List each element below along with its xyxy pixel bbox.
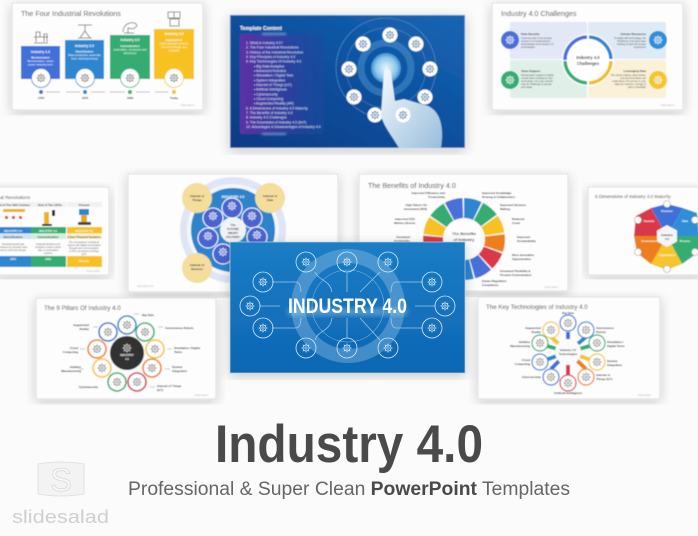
slide: The Benefits of Industry 4.0: Increased bbox=[396, 235, 410, 239]
slide: The Four Industrial Revolutions: Mass production, assembly bbox=[68, 53, 101, 57]
slide: The Benefits of Industry 4.0: The Benefits bbox=[452, 231, 477, 236]
slide: The Four Industrial Revolutions: Automation, computers and bbox=[114, 48, 147, 52]
slide: The Benefits of Industry 4.0: Reduced bbox=[512, 217, 524, 221]
slide: Industry 4.0 Challenges: Challenges bbox=[577, 61, 600, 66]
slide: The 9 Pillars Of Industry 4.0: Twins bbox=[174, 350, 182, 354]
slide: The Key Technologies of Industry 4.0 bbox=[478, 297, 660, 399]
slide: Industrial Revolutions table (cropped at left edge): End of The 1970s bbox=[38, 203, 62, 207]
slide: The Key Technologies of Industry 4.0: Cybersecurity bbox=[522, 375, 541, 379]
slide: Industrial Revolutions table (cropped at left edge): complete modern robots bbox=[35, 246, 62, 249]
slide: Industry 4.0 Challenges: Industry 4.0 Challenges bbox=[501, 9, 577, 18]
slide: The 9 Pillars Of Industry 4.0: System bbox=[172, 365, 183, 369]
slide: Industry 4.0 Challenges: slidesalad bbox=[661, 103, 674, 107]
slide: The Four Industrial Revolutions: 1969 bbox=[127, 96, 134, 100]
slide: The Key Technologies of Industry 4.0: Simulation / bbox=[607, 340, 624, 344]
slide: The 9 Pillars Of Industry 4.0: Cybersecurity bbox=[79, 385, 98, 389]
slide: Industry 4.0 Challenges: technologies bbox=[521, 46, 536, 49]
slide: The Four Industrial Revolutions: internet of things, and bbox=[161, 45, 187, 49]
slide: main INDUSTRY 4.0 cover: INDUSTRY 4.0 bbox=[288, 295, 407, 318]
slide: The Key Technologies of Industry 4.0: System bbox=[607, 359, 618, 363]
slide: The Key Technologies of Industry 4.0: Augmented bbox=[525, 326, 541, 330]
slide: Template Content: 6. 6 Dimensions of Industry 4.0 Maturity bbox=[246, 106, 308, 110]
slide: 6 Dimensions of Industry 4.0 Maturity: Data bbox=[682, 219, 688, 223]
slide: Industrial Revolutions table (cropped at left edge): INDUSTRY 4.0 bbox=[75, 229, 94, 233]
slide: Industry 4.0 Challenges: Human Resources bbox=[621, 32, 646, 36]
slide: The Benefits of Industry 4.0: High Return On bbox=[406, 203, 427, 207]
slide: The Benefits of Industry 4.0: of Industry bbox=[454, 237, 475, 242]
slide: The Four Industrial Revolutions: Cyber physical systems, bbox=[160, 42, 189, 46]
slide: The Key Technologies of Industry 4.0: The Key Technologies of Industry 4.0 bbox=[486, 304, 588, 311]
slide: Industry 4.0 Challenges: may be challenge to accept bbox=[521, 83, 552, 86]
slide: The Four Industrial Revolutions: slidesalad bbox=[181, 103, 194, 107]
slide: The 9 Pillars Of Industry 4.0 bbox=[36, 298, 216, 399]
slide: 6 Dimensions of Industry 4.0 Maturity: Organization bbox=[659, 253, 676, 257]
slide: Industrial Revolutions table (cropped at left edge): Automatization bbox=[38, 235, 59, 239]
slide: The Four Industrial Revolutions: Automatization bbox=[120, 44, 140, 48]
slide: Industry 4.0 Challenges: To adapt with technology, the bbox=[614, 37, 647, 40]
slide: Industrial Revolutions table (cropped at left edge): Cyber Physical Systems bbox=[67, 235, 101, 239]
slide: Internet of Things circular diagram: Things bbox=[192, 198, 202, 202]
slide: The Key Technologies of Industry 4.0: Technologies bbox=[559, 352, 578, 356]
slide: Template Content: 7. The Benefits of Industry 4.0 bbox=[246, 111, 293, 115]
slide: 6 Dimensions of Industry 4.0 Maturity: Process bbox=[680, 239, 691, 243]
slide: Template Content: 5. Key Technologies Of Industry 4.0 bbox=[246, 60, 301, 64]
slide: The Four Industrial Revolutions: power, weaving loom bbox=[28, 62, 54, 66]
slide: Internet of Things circular diagram: Internet of bbox=[190, 263, 204, 267]
slide: The 9 Pillars Of Industry 4.0: slidesalad bbox=[195, 393, 208, 397]
slide: The Benefits of Industry 4.0: Costs bbox=[512, 221, 520, 225]
slide: The 9 Pillars Of Industry 4.0: Additive bbox=[70, 365, 81, 369]
slide: Internet of Things circular diagram: Data bbox=[267, 198, 274, 202]
slide: Industry 4.0 Challenges: concerns of smart/network bbox=[521, 40, 551, 43]
subtitle: Professional & Super Clean PowerPoint Templates bbox=[128, 479, 570, 500]
slide: Industry 4.0 Challenges: and adapt bbox=[521, 86, 532, 89]
slide: Template Content: • System Integration bbox=[254, 78, 285, 82]
slide: Industry 4.0 Challenges: crucial when needing to new bbox=[521, 77, 553, 80]
slide: The Benefits of Industry 4.0: Increased Flexibility & bbox=[500, 269, 531, 273]
slide: Industrial Revolutions table (cropped at left edge): objects with digital technologies bbox=[67, 244, 102, 247]
slide: Industrial Revolutions table (cropped at left edge): Industrial growth was bbox=[2, 243, 25, 246]
slide: Template Content: 9. The Downsides of Industry 4.0 (IIoT) bbox=[246, 120, 306, 124]
slide: The 9 Pillars Of Industry 4.0: The 9 Pillars Of Industry 4.0 bbox=[44, 305, 121, 312]
slide: The Benefits of Industry 4.0: Improved Efficiency and bbox=[412, 191, 445, 195]
slide: Template Content: • Simulation / Digital Twin bbox=[254, 74, 293, 78]
logo: slidesalad: S bbox=[50, 462, 72, 498]
slide: The Key Technologies of Industry 4.0: Additive bbox=[519, 340, 530, 344]
slide: Internet of Things circular diagram: FUTURE bbox=[227, 227, 239, 231]
slide: The Four Industrial Revolutions: Mechanization bbox=[31, 56, 50, 60]
slide: The Benefits of Industry 4.0: Profitability bbox=[394, 239, 410, 243]
slide: 6 Dimensions of Industry 4.0 Maturity: 6 Dimensions of Industry 4.0 Maturity bbox=[595, 194, 672, 199]
slide: Template Content: • Cybersecurity bbox=[254, 92, 278, 96]
slide: Template Content: 2. The Four Industrial Revolutions bbox=[246, 46, 299, 50]
slide: The Four Industrial Revolutions bbox=[12, 3, 203, 110]
slide: The 9 Pillars Of Industry 4.0: Computing bbox=[63, 350, 78, 354]
slide: The Key Technologies of Industry 4.0: Cloud bbox=[522, 358, 530, 362]
slide: The Four Industrial Revolutions: Industry 2.0 bbox=[75, 44, 94, 48]
slide: The Benefits of Industry 4.0: Easier Regulation bbox=[482, 279, 507, 283]
slide: The Benefits of Industry 4.0: Sustainability bbox=[517, 239, 536, 243]
slide: The 9 Pillars Of Industry 4.0: Big Data bbox=[142, 313, 154, 317]
slide: The 9 Pillars Of Industry 4.0: Integration bbox=[172, 369, 187, 373]
slide: The 9 Pillars Of Industry 4.0: (IoT) bbox=[157, 388, 163, 392]
slide: Template Content: • Cloud Computing bbox=[254, 97, 283, 101]
slide: The Key Technologies of Industry 4.0: Computing bbox=[515, 362, 530, 366]
slide: Industry 4.0 Challenges: Industry 4.0 bbox=[576, 55, 600, 60]
slide: Industrial Revolutions table (cropped at left edge): INDUSTRY 3.0 bbox=[39, 229, 58, 233]
slide: Industrial Revolutions table (cropped at left edge): Present bbox=[79, 203, 89, 207]
slide: 6 Dimensions of Industry 4.0 Maturity bbox=[588, 187, 698, 275]
slide: The Benefits of Industry 4.0: slidesalad bbox=[545, 285, 558, 289]
slide: Template Content: 1. What is Industry 4.0? bbox=[246, 41, 283, 45]
slide: The Four Industrial Revolutions: Industry 4.0 bbox=[164, 32, 184, 36]
slide: The Four Industrial Revolutions: 1870 bbox=[82, 96, 89, 100]
slide: 6 Dimensions of Industry 4.0 Maturity: 4.0 bbox=[665, 237, 669, 241]
slide: The Benefits of Industry 4.0: Making bbox=[500, 207, 510, 211]
slide: Template Content: 10. Advantages & Disadvantages of Industry 4.0 bbox=[246, 125, 321, 129]
slide: The 9 Pillars Of Industry 4.0: Augmented bbox=[73, 323, 89, 327]
slide: Template Content: • Internet of Things (IoT) bbox=[254, 83, 292, 87]
slide: Industry 4.0 Challenges: jobs is feasibility bbox=[627, 86, 647, 89]
slide: The Four Industrial Revolutions: electronics bbox=[124, 51, 137, 55]
slide: Industry 4.0 Challenges: experience bbox=[634, 46, 647, 49]
slide: The Benefits of Industry 4.0: Improved ESG bbox=[395, 217, 416, 221]
slide: Internet of Things circular diagram: FACTORY bbox=[226, 235, 240, 239]
slide: Industrial Revolutions table (cropped at left edge): al Revolutions bbox=[0, 195, 31, 201]
slide: The Four Industrial Revolutions: Industry 1.0 bbox=[31, 50, 50, 54]
slide: The 9 Pillars Of Industry 4.0: 4.0 bbox=[125, 357, 129, 361]
slide: The 9 Pillars Of Industry 4.0: Reality bbox=[80, 327, 89, 331]
slide: The Benefits of Industry 4.0: Metrics (Score) bbox=[394, 221, 415, 225]
slide: Industry 4.0 Challenges: data are massive, change of bbox=[615, 83, 646, 86]
slide: The Key Technologies of Industry 4.0: slidesalad bbox=[638, 393, 651, 397]
slide: The Key Technologies of Industry 4.0: Things (IoT) bbox=[596, 377, 613, 381]
slide: Industrial Revolutions table (cropped at left edge): slidesalad bbox=[87, 269, 100, 273]
slide: Template Content: • Augmented Reality (AR) bbox=[254, 102, 294, 106]
slide: Industry 4.0 Challenges: Team Support bbox=[521, 69, 540, 73]
slide: Internet of Things circular diagram bbox=[128, 174, 338, 292]
slide: Industrial Revolutions table (cropped at left edge): 1870 bbox=[10, 257, 16, 261]
logo: slidesalad: slidesalad bbox=[12, 507, 109, 527]
slide: The Key Technologies of Industry 4.0: Manufacturing bbox=[510, 344, 530, 348]
slide: Internet of Things circular diagram: Services bbox=[191, 267, 203, 271]
slide: Industry 4.0 Challenges bbox=[492, 3, 683, 110]
slide: Industry 4.0 Challenges: understood, the person in your bbox=[612, 80, 646, 83]
slide: The Four Industrial Revolutions: networks bbox=[169, 48, 180, 52]
slide: Template Content: 8. Industry 4.0 Challenges bbox=[246, 116, 287, 120]
slide: Template Content bbox=[230, 15, 465, 148]
slide: Industrial Revolutions table (cropped at left edge): Present bbox=[79, 259, 89, 263]
slide: Industry 4.0 Challenges: Cybersecurity is the primary bbox=[521, 37, 553, 40]
slide: 6 Dimensions of Industry 4.0 Maturity: Governance bbox=[641, 239, 657, 243]
slide: Industrial Revolutions table (cropped at left edge): and by technical change bbox=[0, 249, 27, 252]
slide: Industry 4.0 Challenges: technologies and industry 4.0 bbox=[521, 43, 554, 46]
slide: The Benefits of Industry 4.0 bbox=[359, 174, 568, 291]
slide: The Four Industrial Revolutions: Industry 3.0 bbox=[120, 38, 140, 42]
slide: 6 Dimensions of Industry 4.0 Maturity: Industry bbox=[661, 233, 673, 237]
slide: Industrial Revolutions table (cropped at left edge): 1969 bbox=[45, 257, 51, 261]
main title: Industry 4.0 bbox=[215, 415, 483, 474]
slide: The 9 Pillars Of Industry 4.0: Simulation / Digital bbox=[174, 346, 200, 350]
slide: Template Content: • Big Data Analytics bbox=[254, 64, 285, 68]
slide: The Benefits of Industry 4.0: Improved bbox=[517, 235, 530, 239]
slide: The Four Industrial Revolutions: Electrification bbox=[76, 50, 94, 54]
slide: The Key Technologies of Industry 4.0: Internet of bbox=[596, 373, 610, 377]
slide: The Benefits of Industry 4.0: Improved Knowledge bbox=[482, 191, 512, 195]
slide: 6 Dimensions of Industry 4.0 Maturity: Security bbox=[644, 219, 655, 223]
slide: Industrial Revolutions table (cropped at left edge): INDUSTRY 2.0 bbox=[4, 229, 23, 233]
slide: The Key Technologies of Industry 4.0: Reality bbox=[532, 330, 541, 334]
slide: The Four Industrial Revolutions: Digitalization bbox=[166, 38, 183, 42]
slide: Internet of Things circular diagram: INDUSTRY 4.0 bbox=[222, 195, 245, 199]
slide: Industrial Revolutions table (cropped at left edge): through web communication bbox=[69, 247, 100, 250]
slide: The Benefits of Industry 4.0: Investment (ROI) bbox=[404, 207, 427, 211]
slide: Industrial Revolutions table (cropped at left edge) bbox=[0, 187, 109, 275]
slide: Industry 4.0 Challenges: training to have the proper bbox=[617, 43, 646, 46]
slide: Industrial Revolutions table (cropped at left edge): The convergence of physical bbox=[69, 241, 100, 244]
slide: Industry 4.0 Challenges: Workforce must also have bbox=[617, 40, 647, 43]
slide: The Key Technologies of Industry 4.0: Integration bbox=[607, 363, 622, 367]
slide: The Benefits of Industry 4.0: Improved Decision bbox=[500, 203, 526, 207]
logo: slidesalad bbox=[12, 462, 109, 527]
slide: main INDUSTRY 4.0 cover bbox=[230, 242, 465, 373]
slide: The Key Technologies of Industry 4.0: Industry 4.0 bbox=[560, 348, 576, 352]
slide: The 9 Pillars Of Industry 4.0: INDUSTRY bbox=[120, 353, 134, 357]
slide: The Benefits of Industry 4.0: More Innovative bbox=[512, 253, 534, 257]
slide: Industrial Revolutions table (cropped at left edge): (IoT) bbox=[81, 253, 87, 256]
slide: Industry 4.0 Challenges: technology. You may consult bbox=[521, 80, 553, 83]
slide: The Four Industrial Revolutions: 1784 bbox=[38, 96, 45, 100]
slide: Template Content: • Advanced Robotics bbox=[254, 69, 286, 73]
slide: Industry 4.0 Challenges: Having team support is highly bbox=[521, 74, 555, 77]
slide: Internet of Things circular diagram: Internet of bbox=[190, 194, 204, 198]
slide: Template Content: 3. History of the Industrial Revolution bbox=[246, 50, 303, 54]
slide: Industry 4.0 Challenges: Data Security bbox=[521, 32, 540, 36]
slide: The Key Technologies of Industry 4.0: Autonomous bbox=[596, 326, 614, 330]
slide: The Benefits of Industry 4.0: Compliance bbox=[482, 283, 499, 287]
slide: Industrial Revolutions table (cropped at left edge): Electrification bbox=[3, 235, 23, 239]
slide: The Benefits of Industry 4.0: Sharing & Collaboration bbox=[482, 195, 515, 199]
slide: Internet of Things circular diagram: The bbox=[230, 223, 236, 227]
slide: Internet of Things circular diagram: SMART bbox=[228, 231, 238, 235]
slide: 6 Dimensions of Industry 4.0 Maturity: Direction bbox=[661, 209, 673, 213]
slide: The Benefits of Industry 4.0: Product Customization bbox=[500, 273, 532, 277]
slide: Template Content: Template Content bbox=[240, 26, 282, 32]
slide: Industry 4.0 Challenges: Leveraging Data bbox=[624, 69, 646, 73]
slide: The Benefits of Industry 4.0: The Benefits of Industry 4.0 bbox=[368, 181, 456, 190]
slide: The 9 Pillars Of Industry 4.0: Internet of Things bbox=[157, 384, 182, 388]
slide: The Four Industrial Revolutions: lines, electrical energy bbox=[71, 56, 98, 60]
slide: Industry 4.0 Challenges: The report making, data mining, bbox=[611, 74, 646, 77]
slide: Template Content: 4. Key Principles of Industry 4.0 bbox=[246, 55, 295, 59]
slide: Industrial Revolutions table (cropped at left edge): Industrial divisions and bbox=[36, 243, 61, 246]
slide: Template Content: • Artificial Intelligence bbox=[254, 88, 287, 92]
slide: Industrial Revolutions table (cropped at left edge): take on automation bbox=[38, 249, 59, 252]
slide: Industrial Revolutions table (cropped at left edge): systems bbox=[44, 252, 53, 255]
slide: The Key Technologies of Industry 4.0: Digital Twins bbox=[607, 344, 625, 348]
slide: Internet of Things circular diagram: slidesalad.com bbox=[137, 285, 154, 288]
slide: Internet of Things circular diagram: Internet of bbox=[263, 194, 277, 198]
slide: The Benefits of Industry 4.0: Productivity bbox=[428, 195, 445, 199]
slide: Industry 4.0 Challenges: and documentation are bbox=[620, 77, 647, 80]
slide: The Key Technologies of Industry 4.0: Big Data bbox=[562, 311, 574, 315]
slide: The 9 Pillars Of Industry 4.0: Cloud bbox=[70, 346, 78, 350]
slide: The Benefits of Industry 4.0: Opportunities bbox=[512, 257, 531, 261]
slide: The Key Technologies of Industry 4.0: Artificial Intelligence bbox=[554, 391, 583, 395]
slide: The 9 Pillars Of Industry 4.0: Manufacturing bbox=[61, 369, 81, 373]
slide: The Four Industrial Revolutions: Today bbox=[170, 96, 179, 100]
slide: The Key Technologies of Industry 4.0: Robots bbox=[596, 330, 606, 334]
slide: Industrial Revolutions table (cropped at left edge): of PCs, via internet of things bbox=[69, 250, 100, 253]
slide: The Four Industrial Revolutions: The Four Industrial Revolutions bbox=[21, 9, 121, 18]
slide: The Four Industrial Revolutions: Mechanization, steam bbox=[27, 59, 54, 63]
slide: The 9 Pillars Of Industry 4.0: Autonomous Robots bbox=[165, 326, 194, 330]
